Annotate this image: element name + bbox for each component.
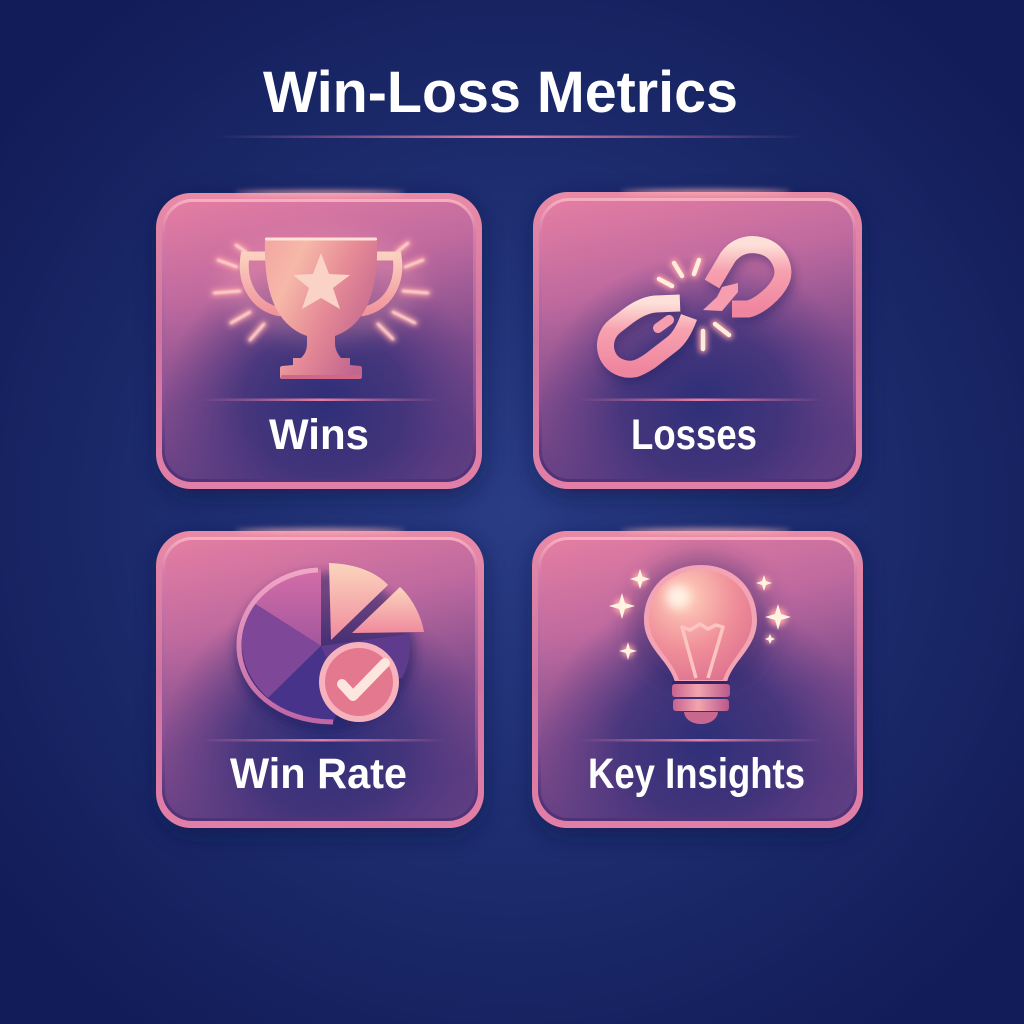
label: wins: Wins (269, 411, 369, 459)
panel: win rate (156, 528, 484, 834)
label: losses: Losses (631, 411, 757, 459)
label: key insights: Key Insights (588, 750, 805, 798)
icon: broken chain link (605, 245, 786, 375)
icon: pie chart with check badge (235, 563, 424, 732)
title: Win-Loss Metrics (263, 60, 738, 125)
icon: trophy (214, 230, 428, 379)
label: win rate: Win Rate (230, 750, 407, 798)
panel: wins (156, 190, 482, 496)
panel: key insights (532, 528, 863, 834)
panel: losses (533, 190, 862, 496)
icon: light bulb with sparkles (609, 555, 791, 724)
